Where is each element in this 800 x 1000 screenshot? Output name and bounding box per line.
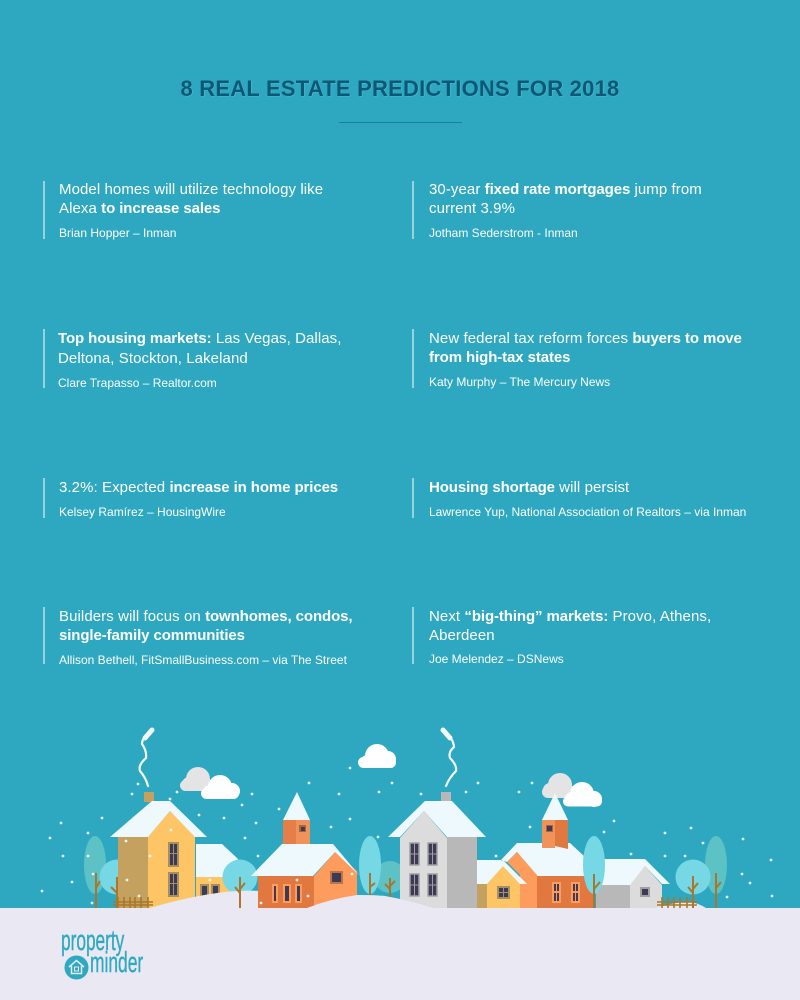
prediction 2: current 3.9% (429, 200, 515, 217)
snow mound centre (307, 895, 433, 908)
prediction 8: Next “big-thing” markets: Provo, Athens, (429, 608, 711, 625)
logo (61, 925, 143, 980)
prediction 2: Jotham Sederstrom - Inman (429, 226, 578, 240)
small tree crown (222, 860, 258, 894)
prediction 8 (412, 607, 722, 664)
prediction 3 (43, 329, 353, 388)
logo word: minder: minder (90, 947, 143, 979)
logo word: property: property (61, 925, 124, 957)
prediction 2 (412, 181, 722, 239)
back trees left (84, 836, 134, 908)
snow mound left (150, 891, 262, 908)
prediction 5: 3.2%: Expected increase in home prices (59, 479, 338, 496)
right trees (676, 836, 727, 908)
clouds (180, 744, 602, 807)
prediction 3: Deltona, Stockton, Lakeland (58, 350, 248, 367)
yellow house (110, 792, 238, 908)
prediction 8: Aberdeen (429, 627, 495, 644)
prediction 7: Builders will focus on townhomes, condos, (59, 608, 352, 625)
tree by cluster (583, 836, 605, 908)
prediction 4: New federal tax reform forces buyers to move (429, 330, 742, 347)
prediction 1: Alexa to increase sales (59, 200, 220, 217)
smoke (140, 730, 456, 786)
cluster house (477, 793, 594, 908)
logo house icon (64, 956, 88, 980)
prediction 2: 30-year fixed rate mortgages jump from (429, 181, 702, 198)
prediction 4: from high-tax states (429, 349, 570, 366)
prediction 4 (412, 329, 752, 388)
orange house with tower (251, 792, 359, 908)
grey house (388, 792, 486, 908)
prediction 7: single-family communities (59, 627, 245, 644)
prediction 7: Allison Bethell, FitSmallBusiness.com – via The Street (59, 653, 347, 667)
prediction 3: Top housing markets: Las Vegas, Dallas, (58, 330, 342, 347)
prediction 5 (43, 478, 343, 518)
snow mound right (655, 902, 706, 908)
prediction 6 (412, 478, 752, 518)
prediction 4: Katy Murphy – The Mercury News (429, 375, 610, 389)
prediction 6: Housing shortage will persist (429, 479, 629, 496)
prediction 3: Clare Trapasso – Realtor.com (58, 376, 217, 390)
middle trees (359, 836, 406, 897)
snowflakes (41, 767, 773, 904)
prediction 5: Kelsey Ramírez – HousingWire (59, 505, 226, 519)
prediction 1 (43, 181, 343, 239)
fence right (657, 897, 697, 908)
title: 8 REAL ESTATE PREDICTIONS FOR 2018 (180, 76, 620, 101)
prediction 6: Lawrence Yup, National Association of Realtors – via Inman (429, 505, 746, 519)
prediction 1: Brian Hopper – Inman (59, 226, 176, 240)
prediction 7 (43, 607, 363, 664)
prediction 8: Joe Melendez – DSNews (429, 652, 564, 666)
snow ground (0, 908, 800, 1000)
title rule (339, 122, 462, 123)
prediction 1: Model homes will utilize technology like (59, 181, 323, 198)
small grey house (596, 859, 670, 908)
fence left (113, 897, 153, 908)
small tree trunk (235, 877, 245, 908)
